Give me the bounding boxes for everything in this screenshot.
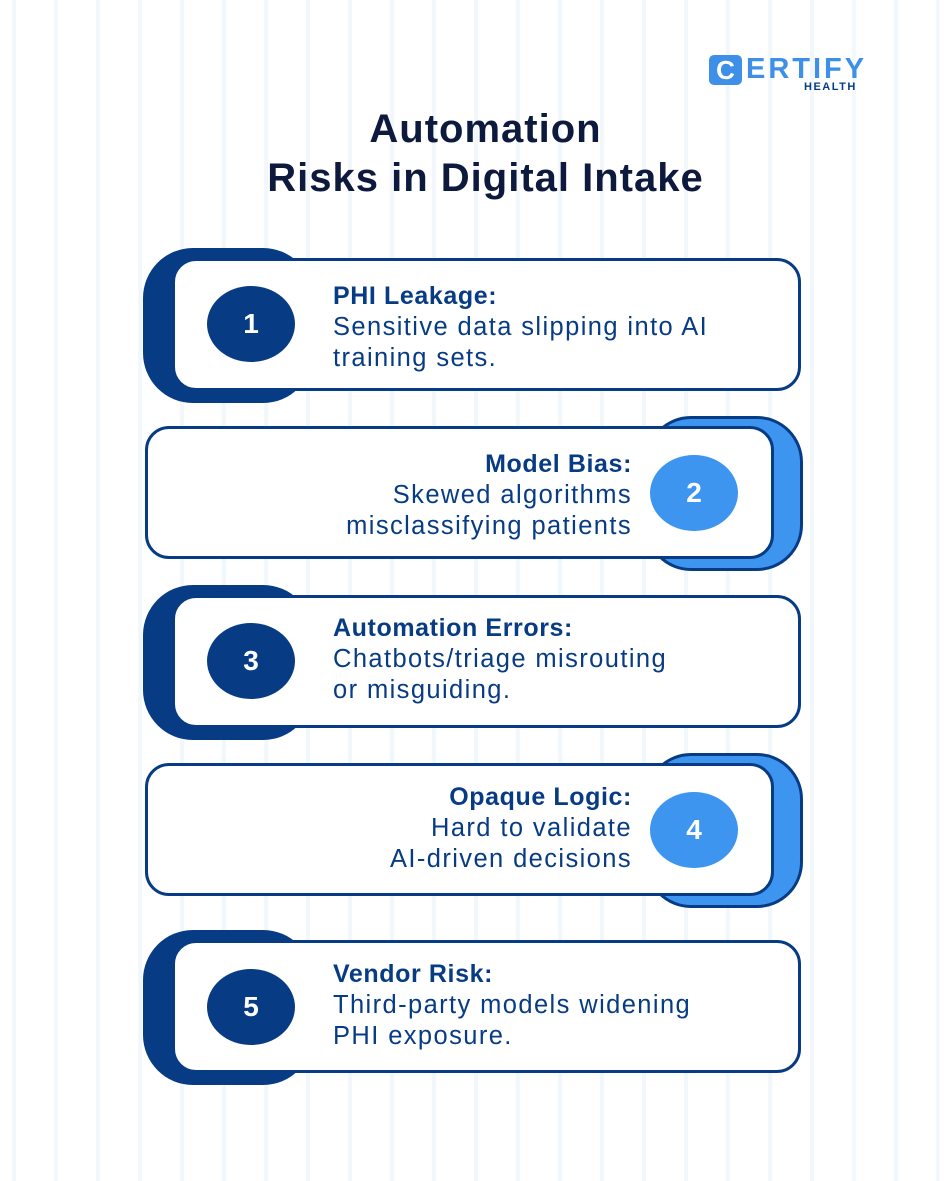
badge 1 — [207, 286, 295, 362]
title — [267, 107, 704, 200]
text 3: Automation Errors: — [333, 614, 573, 642]
text 3 — [333, 614, 667, 704]
text 4: Hard to validate — [431, 814, 632, 842]
text 4: Opaque Logic: — [449, 783, 632, 811]
text 4 — [390, 783, 632, 873]
text 2: misclassifying patients — [346, 512, 632, 540]
text 5: PHI exposure. — [333, 1022, 513, 1050]
badge 5: 5 — [243, 991, 259, 1022]
badge 4: 4 — [686, 814, 702, 845]
badge 4 — [650, 792, 738, 868]
badge 3: 3 — [243, 645, 259, 676]
title: Risks in Digital Intake — [267, 156, 704, 200]
logo: HEALTH — [804, 81, 857, 93]
text 2 — [346, 450, 632, 540]
text 5 — [333, 960, 691, 1050]
title: Automation — [369, 107, 602, 151]
logo — [709, 53, 867, 93]
card 4 — [145, 753, 803, 908]
text 3: or misguiding. — [333, 676, 511, 704]
badge 2: 2 — [686, 477, 702, 508]
text 1: Sensitive data slipping into AI — [333, 313, 708, 341]
text 3: Chatbots/triage misrouting — [333, 645, 667, 673]
text 5: Third-party models widening — [333, 991, 691, 1019]
text 2: Skewed algorithms — [393, 481, 632, 509]
text 4: AI-driven decisions — [390, 845, 632, 873]
logo: ERTIFY — [746, 53, 867, 85]
logo: C — [716, 55, 735, 85]
text 2: Model Bias: — [485, 450, 632, 478]
badge 1: 1 — [243, 308, 259, 339]
text 1: training sets. — [333, 344, 497, 372]
text 1: PHI Leakage: — [333, 282, 497, 310]
card 3 — [143, 585, 801, 740]
badge 5 — [207, 969, 295, 1045]
card 5 — [143, 930, 801, 1085]
card 1 — [143, 248, 801, 403]
badge 3 — [207, 623, 295, 699]
badge 2 — [650, 455, 738, 531]
card 2 — [145, 416, 803, 571]
text 1 — [333, 282, 708, 372]
text 5: Vendor Risk: — [333, 960, 493, 988]
